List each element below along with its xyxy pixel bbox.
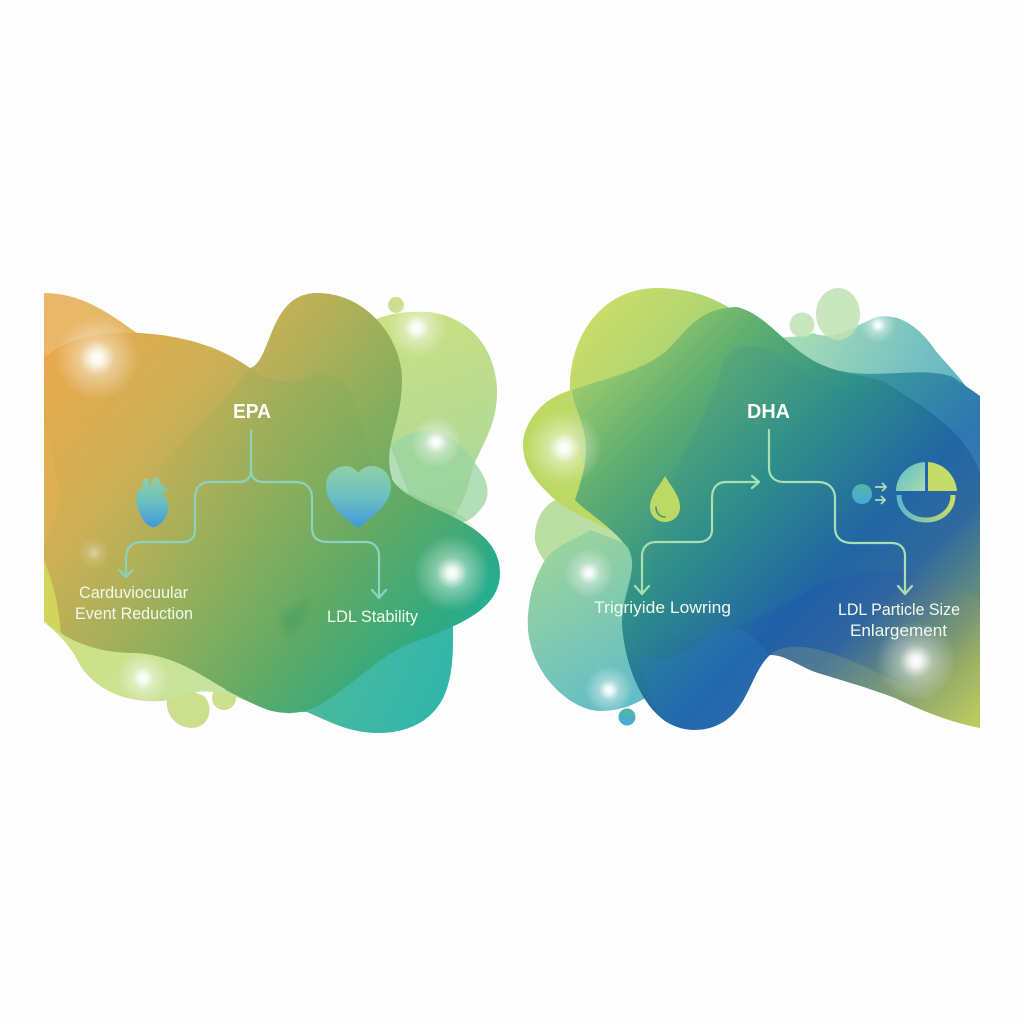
- icon: oil drop: [650, 476, 680, 522]
- lower-right grey fold: [770, 647, 980, 728]
- EPA connector lines: [119, 430, 386, 598]
- light green right blob: [370, 312, 497, 522]
- teal top-right blob: [783, 316, 965, 386]
- main gradient blob: [572, 307, 980, 730]
- icon: size pie chart: [896, 462, 957, 520]
- lime top blob: [570, 288, 729, 464]
- left lower green blob: [534, 500, 624, 561]
- orange top-left blob: [44, 293, 250, 368]
- second translucent right blob: [380, 430, 488, 522]
- inner darker fold: [196, 368, 476, 531]
- DHA blob cluster: [523, 288, 980, 730]
- small lime bubbles: [167, 297, 404, 728]
- panel: DHA: [523, 288, 980, 730]
- icon: anatomical heart: [136, 477, 169, 527]
- label: LDL particle size enlargement: LDL Particle Size: [838, 600, 960, 619]
- blue bubble: [618, 708, 636, 726]
- icon: particle and arrows: [852, 483, 886, 504]
- panel: EPA: [44, 293, 500, 733]
- infographic canvas: [44, 288, 980, 733]
- bottom-left teal blob: [528, 530, 644, 711]
- label: LDL particle size enlargement: [838, 600, 960, 640]
- left edge orange tint: [44, 425, 60, 545]
- label: cardiovascular event reduction: [75, 583, 193, 623]
- small bubbles top: [790, 288, 860, 340]
- EPA blob cluster: [44, 293, 500, 733]
- bottom blue fold: [640, 628, 768, 730]
- lime corner on left edge: [44, 560, 61, 634]
- label: LDL stability: LDL Stability: [327, 607, 418, 626]
- lime bottom-left blob: [44, 620, 290, 714]
- glows: [526, 307, 956, 714]
- label: LDL particle size enlargement: Enlargement: [850, 621, 947, 640]
- label: triglyceride lowering: Trigriyide Lowring: [594, 598, 731, 617]
- heading: EPA: EPA: [233, 401, 271, 423]
- label: cardiovascular event reduction: Carduviocuular: [79, 583, 188, 602]
- label: cardiovascular event reduction: Event Reduction: [75, 604, 193, 623]
- translucent upper-right sheen: [830, 368, 980, 473]
- main gradient blob: [44, 293, 500, 713]
- DHA connector lines: [635, 430, 912, 594]
- icon: heart: [326, 466, 391, 528]
- teal lower blob: [225, 620, 453, 733]
- translucent overlay fold: [964, 576, 980, 600]
- dark smudge: [280, 601, 308, 634]
- heading: DHA: DHA: [747, 401, 790, 423]
- glows: [55, 298, 490, 704]
- lime left blob: [522, 390, 610, 530]
